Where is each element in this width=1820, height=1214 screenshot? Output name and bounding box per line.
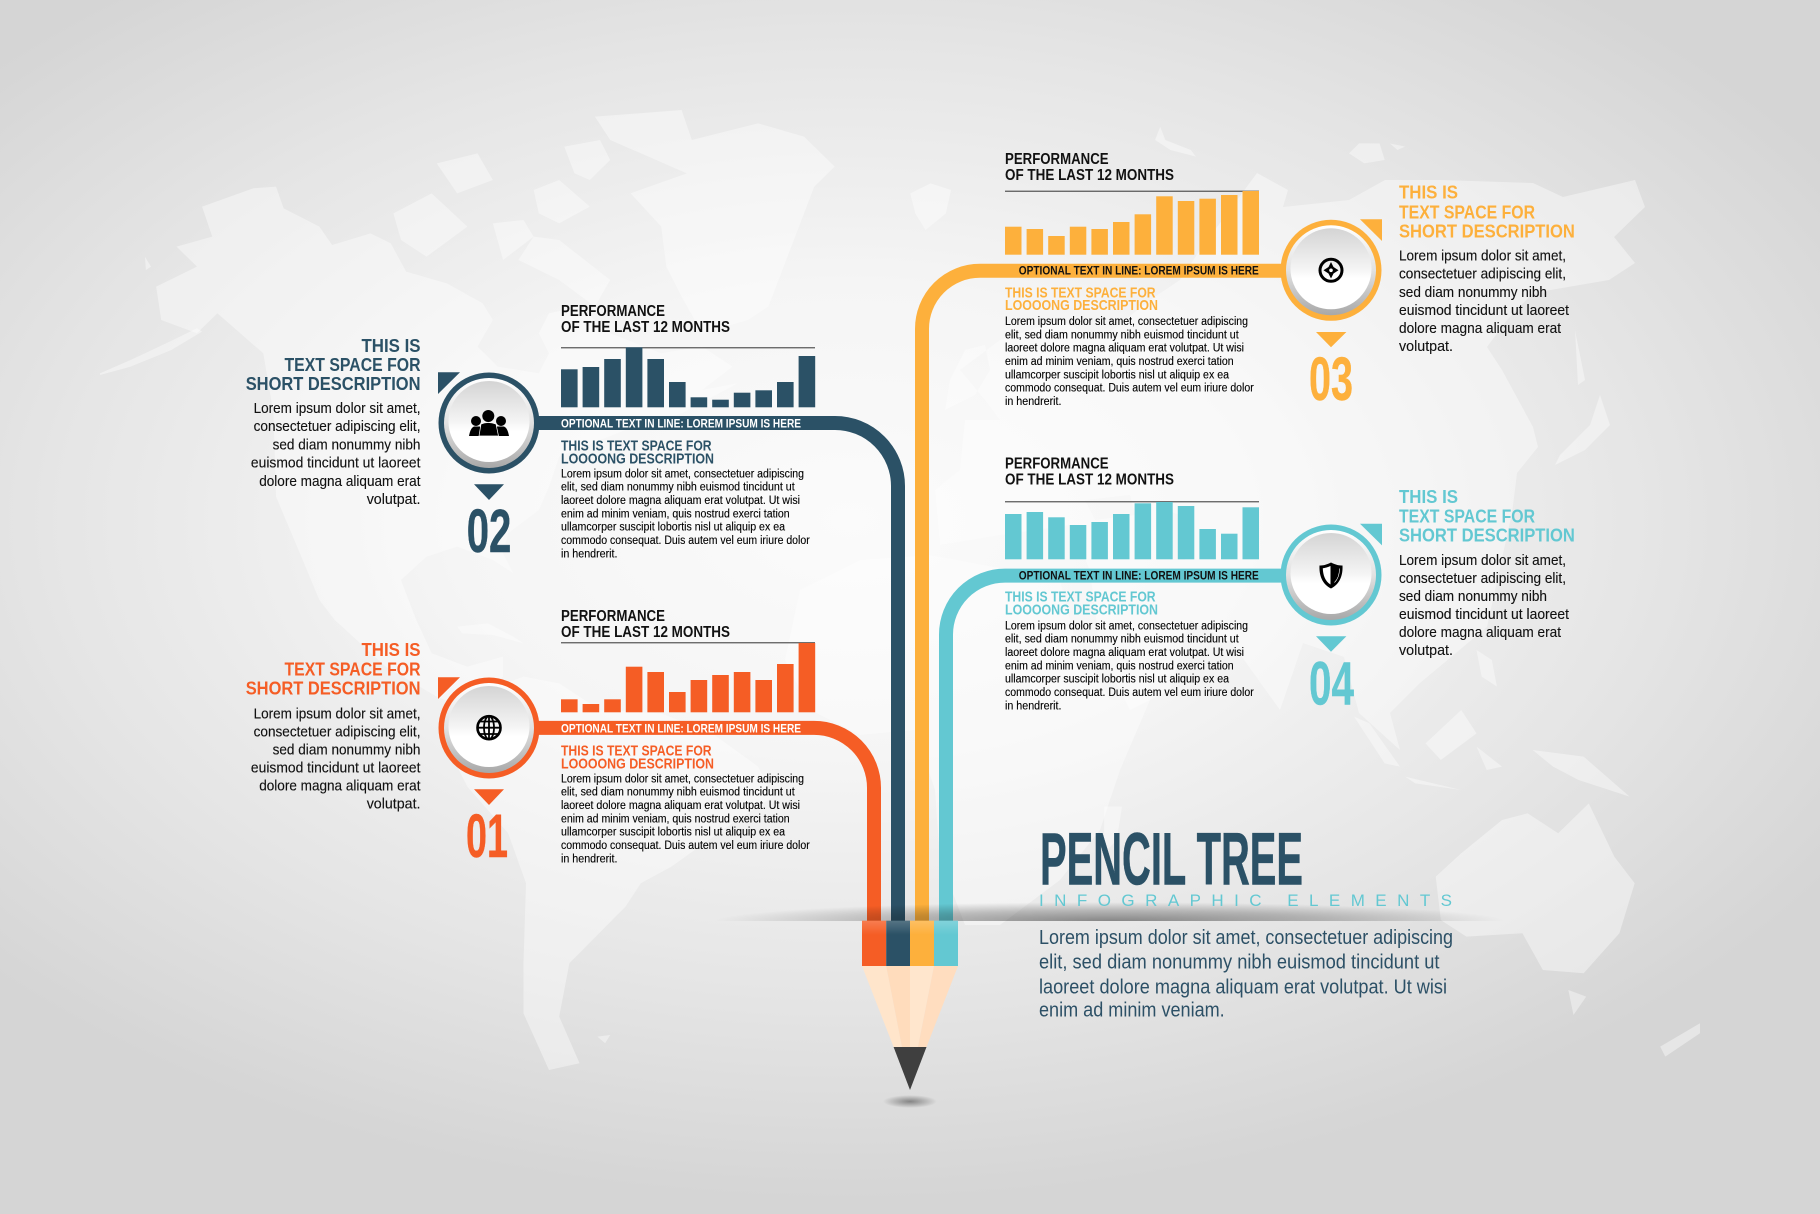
chart heading 02 (561, 303, 730, 336)
side heading 03: TEXT SPACE FOR (1399, 201, 1535, 222)
paragraph 01: ullamcorper suscipit lobortis nisl ut aliquip ex ea (561, 827, 786, 839)
side text 02 (251, 401, 420, 508)
paragraph 04: in hendrerit. (1005, 700, 1062, 712)
side heading 02 (246, 335, 420, 394)
sub heading 03: LOOOONG DESCRIPTION (1005, 297, 1158, 314)
side heading 01: THIS IS (362, 639, 420, 660)
chart heading 01: OF THE LAST 12 MONTHS (561, 624, 730, 641)
description: laoreet dolore magna aliquam erat volutpat. Ut wisi (1039, 976, 1447, 998)
paragraph 02: elit, sed diam nonummy nibh euismod tincidunt ut (561, 482, 795, 494)
pencil (862, 921, 958, 1108)
paragraph 01: commodo consequat. Duis autem vel eum iriure dolor (561, 840, 810, 852)
paragraph 01: in hendrerit. (561, 853, 618, 865)
icon: shield (1319, 562, 1343, 588)
ground shadow (744, 904, 1476, 921)
circle badge 03 (1280, 220, 1382, 321)
pencil shadow (883, 1095, 937, 1108)
chart heading 02: OF THE LAST 12 MONTHS (561, 319, 730, 336)
chart heading 01: PERFORMANCE (561, 608, 665, 625)
sub heading 04 (1005, 589, 1158, 618)
side text 02: sed diam nonummy nibh (273, 437, 420, 453)
paragraph 01: enim ad minim veniam, quis nostrud exerci tation (561, 813, 790, 825)
sub heading 04: THIS IS TEXT SPACE FOR (1005, 589, 1156, 606)
icon: compass (1320, 259, 1342, 281)
branch 04 (946, 576, 1331, 925)
panel: 04 (1005, 455, 1575, 717)
side text 01 (251, 706, 420, 812)
chart heading 03 (1005, 151, 1174, 184)
number 04: 04 (1309, 649, 1354, 717)
number 01: 01 (466, 802, 508, 870)
bar chart 03 (1005, 191, 1259, 255)
number 02: 02 (467, 497, 511, 565)
sub heading 01 (561, 743, 714, 772)
paragraph 03 (1005, 316, 1254, 408)
side text 04 (1399, 553, 1569, 659)
paragraph 04: elit, sed diam nonummy nibh euismod tincidunt ut (1005, 634, 1239, 646)
bar chart 01 (561, 642, 815, 712)
side text 04: sed diam nonummy nibh (1399, 589, 1547, 605)
paragraph 04: Lorem ipsum dolor sit amet, consectetuer adipiscing (1005, 620, 1248, 632)
side heading 02: SHORT DESCRIPTION (246, 373, 420, 394)
chart heading 03: OF THE LAST 12 MONTHS (1005, 167, 1174, 184)
paragraph 03: elit, sed diam nonummy nibh euismod tincidunt ut (1005, 329, 1239, 341)
side text 02: Lorem ipsum dolor sit amet, (254, 401, 420, 417)
paragraph 04: laoreet dolore magna aliquam erat volutpat. Ut wisi (1005, 647, 1244, 659)
side text 02: consectetuer adipiscing elit, (254, 419, 420, 435)
description (1039, 927, 1453, 1022)
branch 03 (922, 271, 1331, 925)
down triangle 03 (1316, 332, 1346, 347)
side text 04: Lorem ipsum dolor sit amet, (1399, 553, 1566, 569)
chart heading 02: PERFORMANCE (561, 303, 665, 320)
side text 03: sed diam nonummy nibh (1399, 285, 1547, 301)
paragraph 02: ullamcorper suscipit lobortis nisl ut aliquip ex ea (561, 522, 786, 534)
pencil wood (862, 966, 958, 1047)
sub heading 01: LOOOONG DESCRIPTION (561, 755, 714, 772)
sub heading 02: THIS IS TEXT SPACE FOR (561, 438, 712, 455)
side heading 02: TEXT SPACE FOR (284, 354, 420, 375)
side heading 02: THIS IS (362, 335, 420, 356)
side text 03: euismod tincidunt ut laoreet (1399, 303, 1569, 319)
side text 03: Lorem ipsum dolor sit amet, (1399, 249, 1566, 265)
side text 02: euismod tincidunt ut laoreet (251, 456, 420, 472)
chart heading 04: OF THE LAST 12 MONTHS (1005, 471, 1174, 488)
side text 04: dolore magna aliquam erat (1399, 625, 1561, 641)
pencil lead (894, 1047, 926, 1090)
pencil colour bands (862, 921, 958, 966)
chart heading 03: PERFORMANCE (1005, 151, 1109, 168)
side text 03: dolore magna aliquam erat (1399, 321, 1561, 337)
corner triangle 01 (438, 677, 460, 699)
sub heading 03 (1005, 284, 1158, 314)
sub heading 01: THIS IS TEXT SPACE FOR (561, 743, 712, 760)
description: elit, sed diam nonummy nibh euismod tincidunt ut (1039, 952, 1440, 974)
title: PENCIL TREE (1040, 818, 1303, 900)
circle badge 01 (438, 678, 540, 778)
side heading 04 (1399, 486, 1575, 546)
side text 03: volutpat. (1399, 339, 1453, 355)
circle badge 04 (1280, 524, 1382, 626)
side text 02: volutpat. (367, 492, 420, 508)
side heading 04: TEXT SPACE FOR (1399, 506, 1535, 527)
paragraph 04: enim ad minim veniam, quis nostrud exerci tation (1005, 660, 1234, 672)
side text 02: dolore magna aliquam erat (259, 474, 420, 490)
side heading 03: SHORT DESCRIPTION (1399, 220, 1575, 241)
paragraph 04: ullamcorper suscipit lobortis nisl ut aliquip ex ea (1005, 674, 1230, 686)
side heading 04: SHORT DESCRIPTION (1399, 525, 1575, 546)
branch 02 (489, 423, 898, 925)
side heading 01 (246, 639, 420, 698)
description: enim ad minim veniam. (1039, 1000, 1225, 1022)
side text 01: volutpat. (367, 796, 420, 812)
paragraph 01: elit, sed diam nonummy nibh euismod tincidunt ut (561, 787, 795, 799)
paragraph 03: enim ad minim veniam, quis nostrud exerci tation (1005, 356, 1234, 368)
side text 01: Lorem ipsum dolor sit amet, (254, 706, 420, 722)
side text 04: volutpat. (1399, 643, 1453, 659)
side heading 01: TEXT SPACE FOR (284, 658, 420, 680)
paragraph 02: Lorem ipsum dolor sit amet, consectetuer adipiscing (561, 468, 804, 480)
paragraph 03: laoreet dolore magna aliquam erat volutpat. Ut wisi (1005, 343, 1244, 355)
paragraph 03: commodo consequat. Duis autem vel eum iriure dolor (1005, 383, 1254, 395)
side heading 03 (1399, 182, 1575, 241)
sub heading 04: LOOOONG DESCRIPTION (1005, 601, 1158, 618)
branch 01 (489, 728, 874, 925)
panel: 02 (246, 303, 815, 565)
paragraph 02 (561, 468, 810, 560)
panel: 03 (1005, 151, 1575, 413)
icon: people (469, 410, 509, 436)
paragraph 03: ullamcorper suscipit lobortis nisl ut aliquip ex ea (1005, 369, 1230, 381)
side text 03: consectetuer adipiscing elit, (1399, 267, 1566, 283)
subtitle: INFOGRAPHIC ELEMENTS (1039, 891, 1452, 910)
side text 01: consectetuer adipiscing elit, (254, 724, 420, 740)
band text 03: OPTIONAL TEXT IN LINE: LOREM IPSUM IS HERE (1019, 264, 1259, 278)
description: Lorem ipsum dolor sit amet, consectetuer adipiscing (1039, 927, 1453, 949)
corner triangle 03 (1360, 219, 1382, 241)
paragraph 02: in hendrerit. (561, 548, 618, 560)
panel: 01 (246, 608, 815, 870)
chart heading 01 (561, 608, 730, 641)
pipes: coloured pencil tree branches (489, 271, 1331, 925)
chart heading 04: PERFORMANCE (1005, 455, 1109, 472)
paragraph 03: Lorem ipsum dolor sit amet, consectetuer adipiscing (1005, 316, 1248, 328)
sub heading 03: THIS IS TEXT SPACE FOR (1005, 284, 1156, 301)
down triangle 04 (1316, 636, 1346, 652)
bar chart 04 (1005, 501, 1259, 559)
down triangle 01 (474, 789, 504, 805)
down triangle 02 (474, 484, 504, 500)
corner triangle 04 (1360, 524, 1382, 545)
icon: globe (478, 716, 500, 740)
side heading 01: SHORT DESCRIPTION (246, 678, 420, 698)
paragraph 02: laoreet dolore magna aliquam erat volutpat. Ut wisi (561, 495, 800, 507)
circle badge 02 (438, 372, 540, 474)
side heading 04: THIS IS (1399, 486, 1458, 507)
side text 04: euismod tincidunt ut laoreet (1399, 607, 1569, 623)
band text 04: OPTIONAL TEXT IN LINE: LOREM IPSUM IS HERE (1019, 568, 1259, 582)
band text 02: OPTIONAL TEXT IN LINE: LOREM IPSUM IS HERE (561, 416, 801, 430)
paragraph 01: Lorem ipsum dolor sit amet, consectetuer adipiscing (561, 773, 804, 785)
paragraph 04: commodo consequat. Duis autem vel eum iriure dolor (1005, 687, 1254, 699)
paragraph 04 (1005, 620, 1254, 712)
paragraph 02: commodo consequat. Duis autem vel eum iriure dolor (561, 535, 810, 547)
band text 01: OPTIONAL TEXT IN LINE: LOREM IPSUM IS HERE (561, 721, 801, 735)
side text 01: dolore magna aliquam erat (259, 778, 420, 794)
sub heading 02 (561, 438, 714, 467)
paragraph 01: laoreet dolore magna aliquam erat volutpat. Ut wisi (561, 800, 800, 812)
side text 04: consectetuer adipiscing elit, (1399, 571, 1566, 587)
world map (100, 110, 1700, 1070)
paragraph 03: in hendrerit. (1005, 396, 1062, 408)
paragraph 02: enim ad minim veniam, quis nostrud exerci tation (561, 508, 790, 520)
side text 01: euismod tincidunt ut laoreet (251, 760, 420, 776)
corner triangle 02 (438, 372, 460, 394)
paragraph 01 (561, 773, 810, 865)
number 03: 03 (1309, 345, 1353, 413)
side text 01: sed diam nonummy nibh (273, 742, 420, 758)
bar chart 02 (561, 347, 815, 407)
side heading 03: THIS IS (1399, 182, 1458, 203)
side text 03 (1399, 249, 1569, 355)
chart heading 04 (1005, 455, 1174, 488)
sub heading 02: LOOOONG DESCRIPTION (561, 450, 714, 467)
